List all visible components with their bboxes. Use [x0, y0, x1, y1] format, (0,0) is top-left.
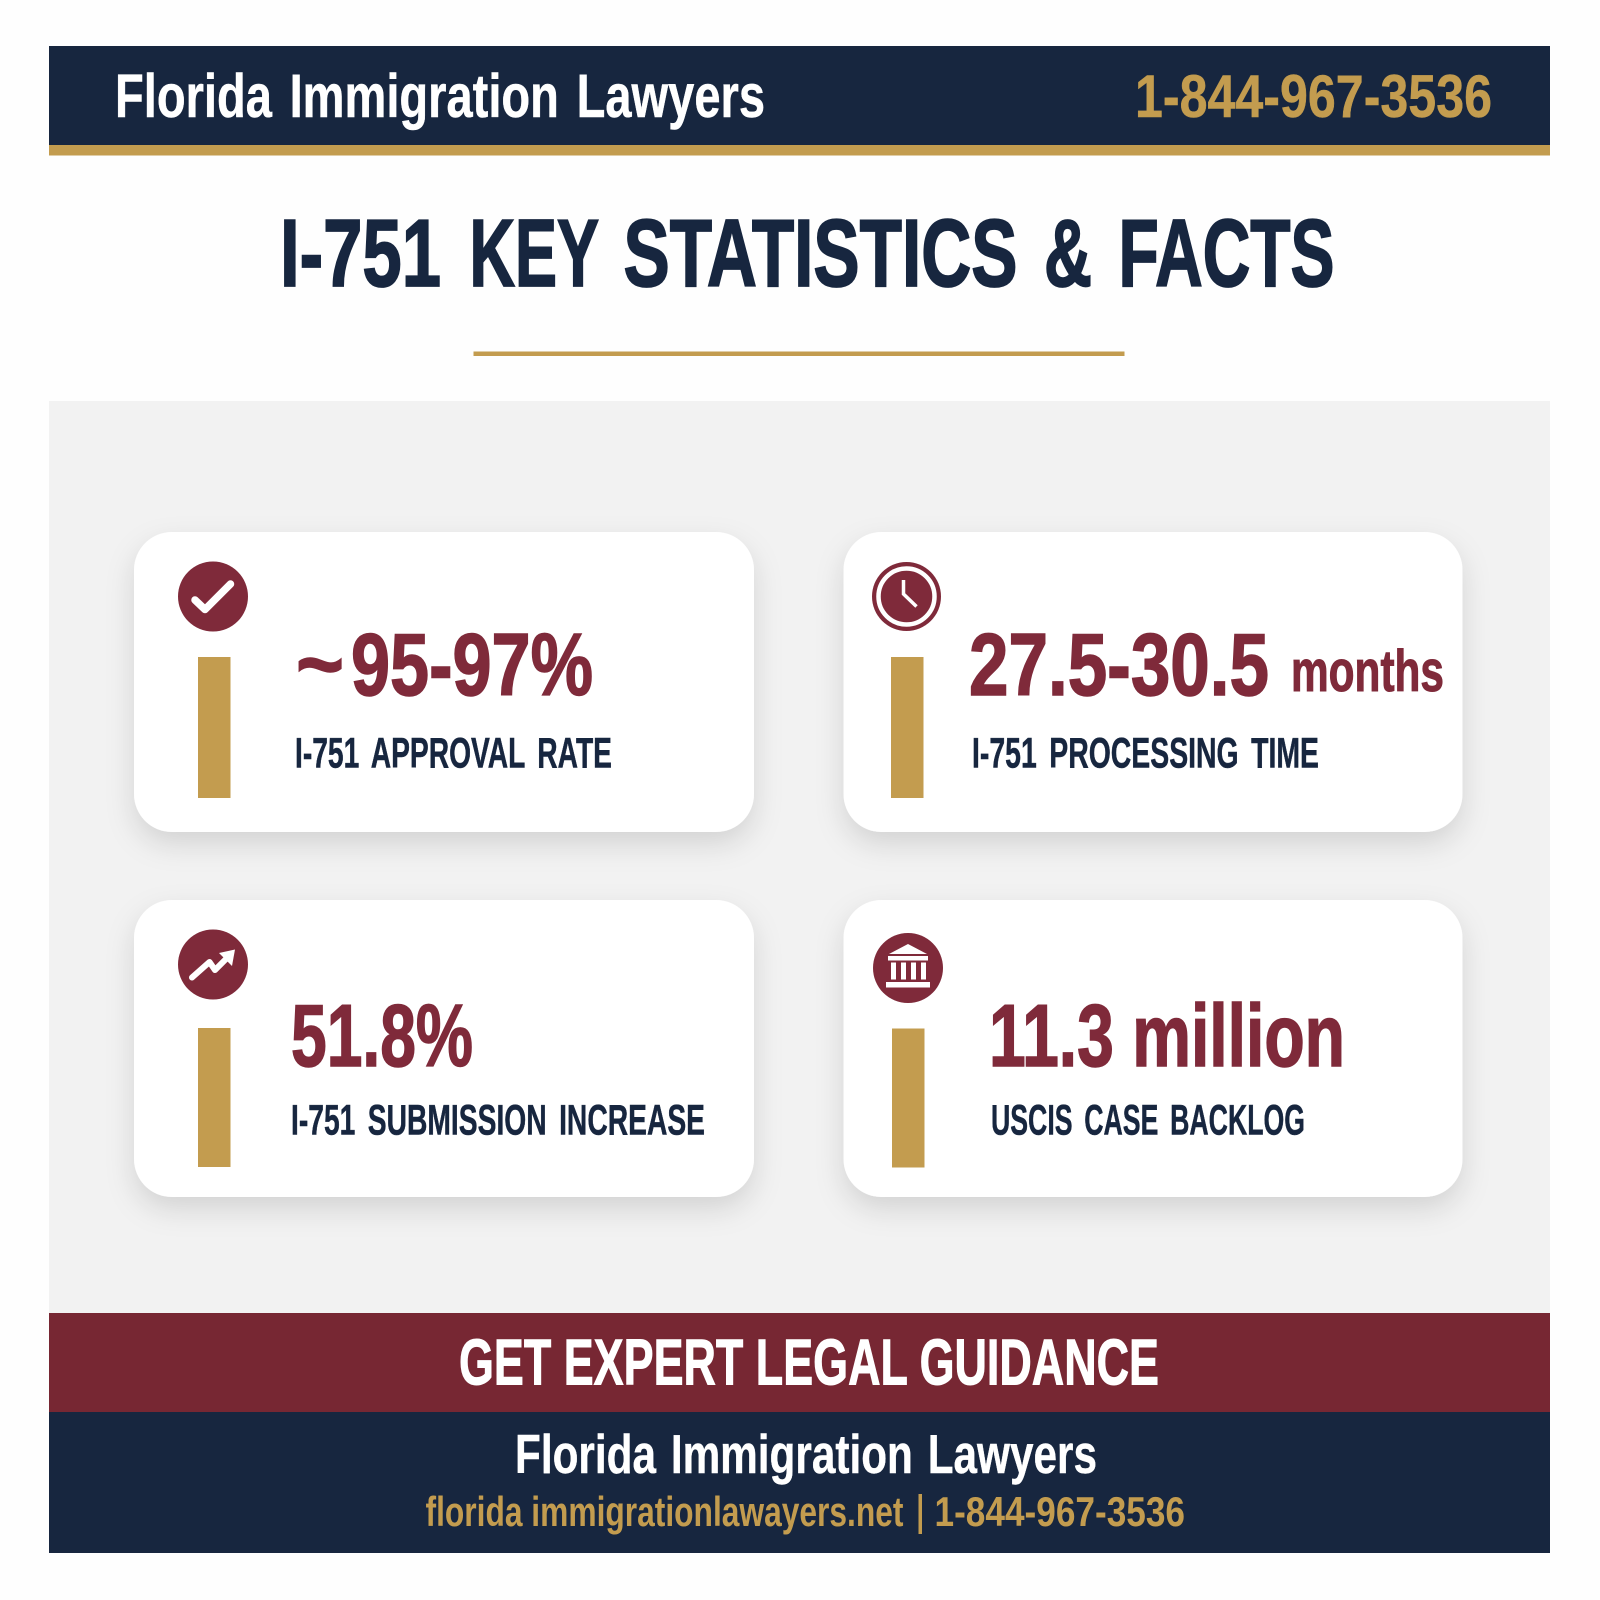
title [280, 200, 1334, 307]
header firm name: Florida Immigration Lawyers [115, 62, 765, 130]
stat value: 95-97% [351, 615, 593, 714]
icon: courthouse [873, 933, 943, 1003]
stat value: 51.8% [291, 986, 473, 1085]
title: KEY [470, 200, 599, 307]
card: submission increase [134, 900, 754, 1197]
footer band [49, 1412, 1550, 1553]
card: case backlog [844, 900, 1462, 1197]
accent bar [892, 1028, 924, 1168]
card: approval rate [134, 532, 754, 832]
stat value: ~ [296, 614, 344, 713]
footer phone number: 1-844-967-3536 [934, 1488, 1185, 1535]
icon: check mark [178, 562, 248, 632]
call to action text: GET EXPERT LEGAL GUIDANCE [459, 1326, 1159, 1398]
stat label: I-751 SUBMISSION INCREASE [291, 1096, 705, 1144]
title: & [1044, 200, 1092, 307]
stat label: USCIS CASE BACKLOG [991, 1096, 1305, 1144]
title: I-751 [280, 200, 441, 307]
header bar [49, 46, 1550, 156]
accent bar [891, 657, 924, 798]
stat value [296, 614, 593, 714]
title: FACTS [1118, 200, 1334, 307]
title underline [474, 352, 1124, 356]
footer website: florida immigrationlawayers.net [426, 1488, 904, 1535]
title: STATISTICS [624, 200, 1018, 307]
stat value: 11.3 million [989, 986, 1345, 1085]
call to action band [49, 1313, 1550, 1412]
header phone number: 1-844-967-3536 [1135, 63, 1492, 130]
stat value: 27.5-30.5 [969, 615, 1269, 714]
accent bar [198, 657, 230, 798]
icon: clock [872, 562, 941, 631]
accent bar [198, 1028, 230, 1167]
stat label: I-751 PROCESSING TIME [972, 730, 1319, 778]
card: processing time [844, 532, 1462, 832]
panel: statistics [49, 401, 1550, 1313]
stat unit: months [1291, 639, 1444, 704]
footer firm name: Florida Immigration Lawyers [515, 1423, 1097, 1485]
stat label: I-751 APPROVAL RATE [295, 730, 612, 778]
footer separator [918, 1494, 922, 1534]
icon: rising arrow [178, 930, 248, 1000]
